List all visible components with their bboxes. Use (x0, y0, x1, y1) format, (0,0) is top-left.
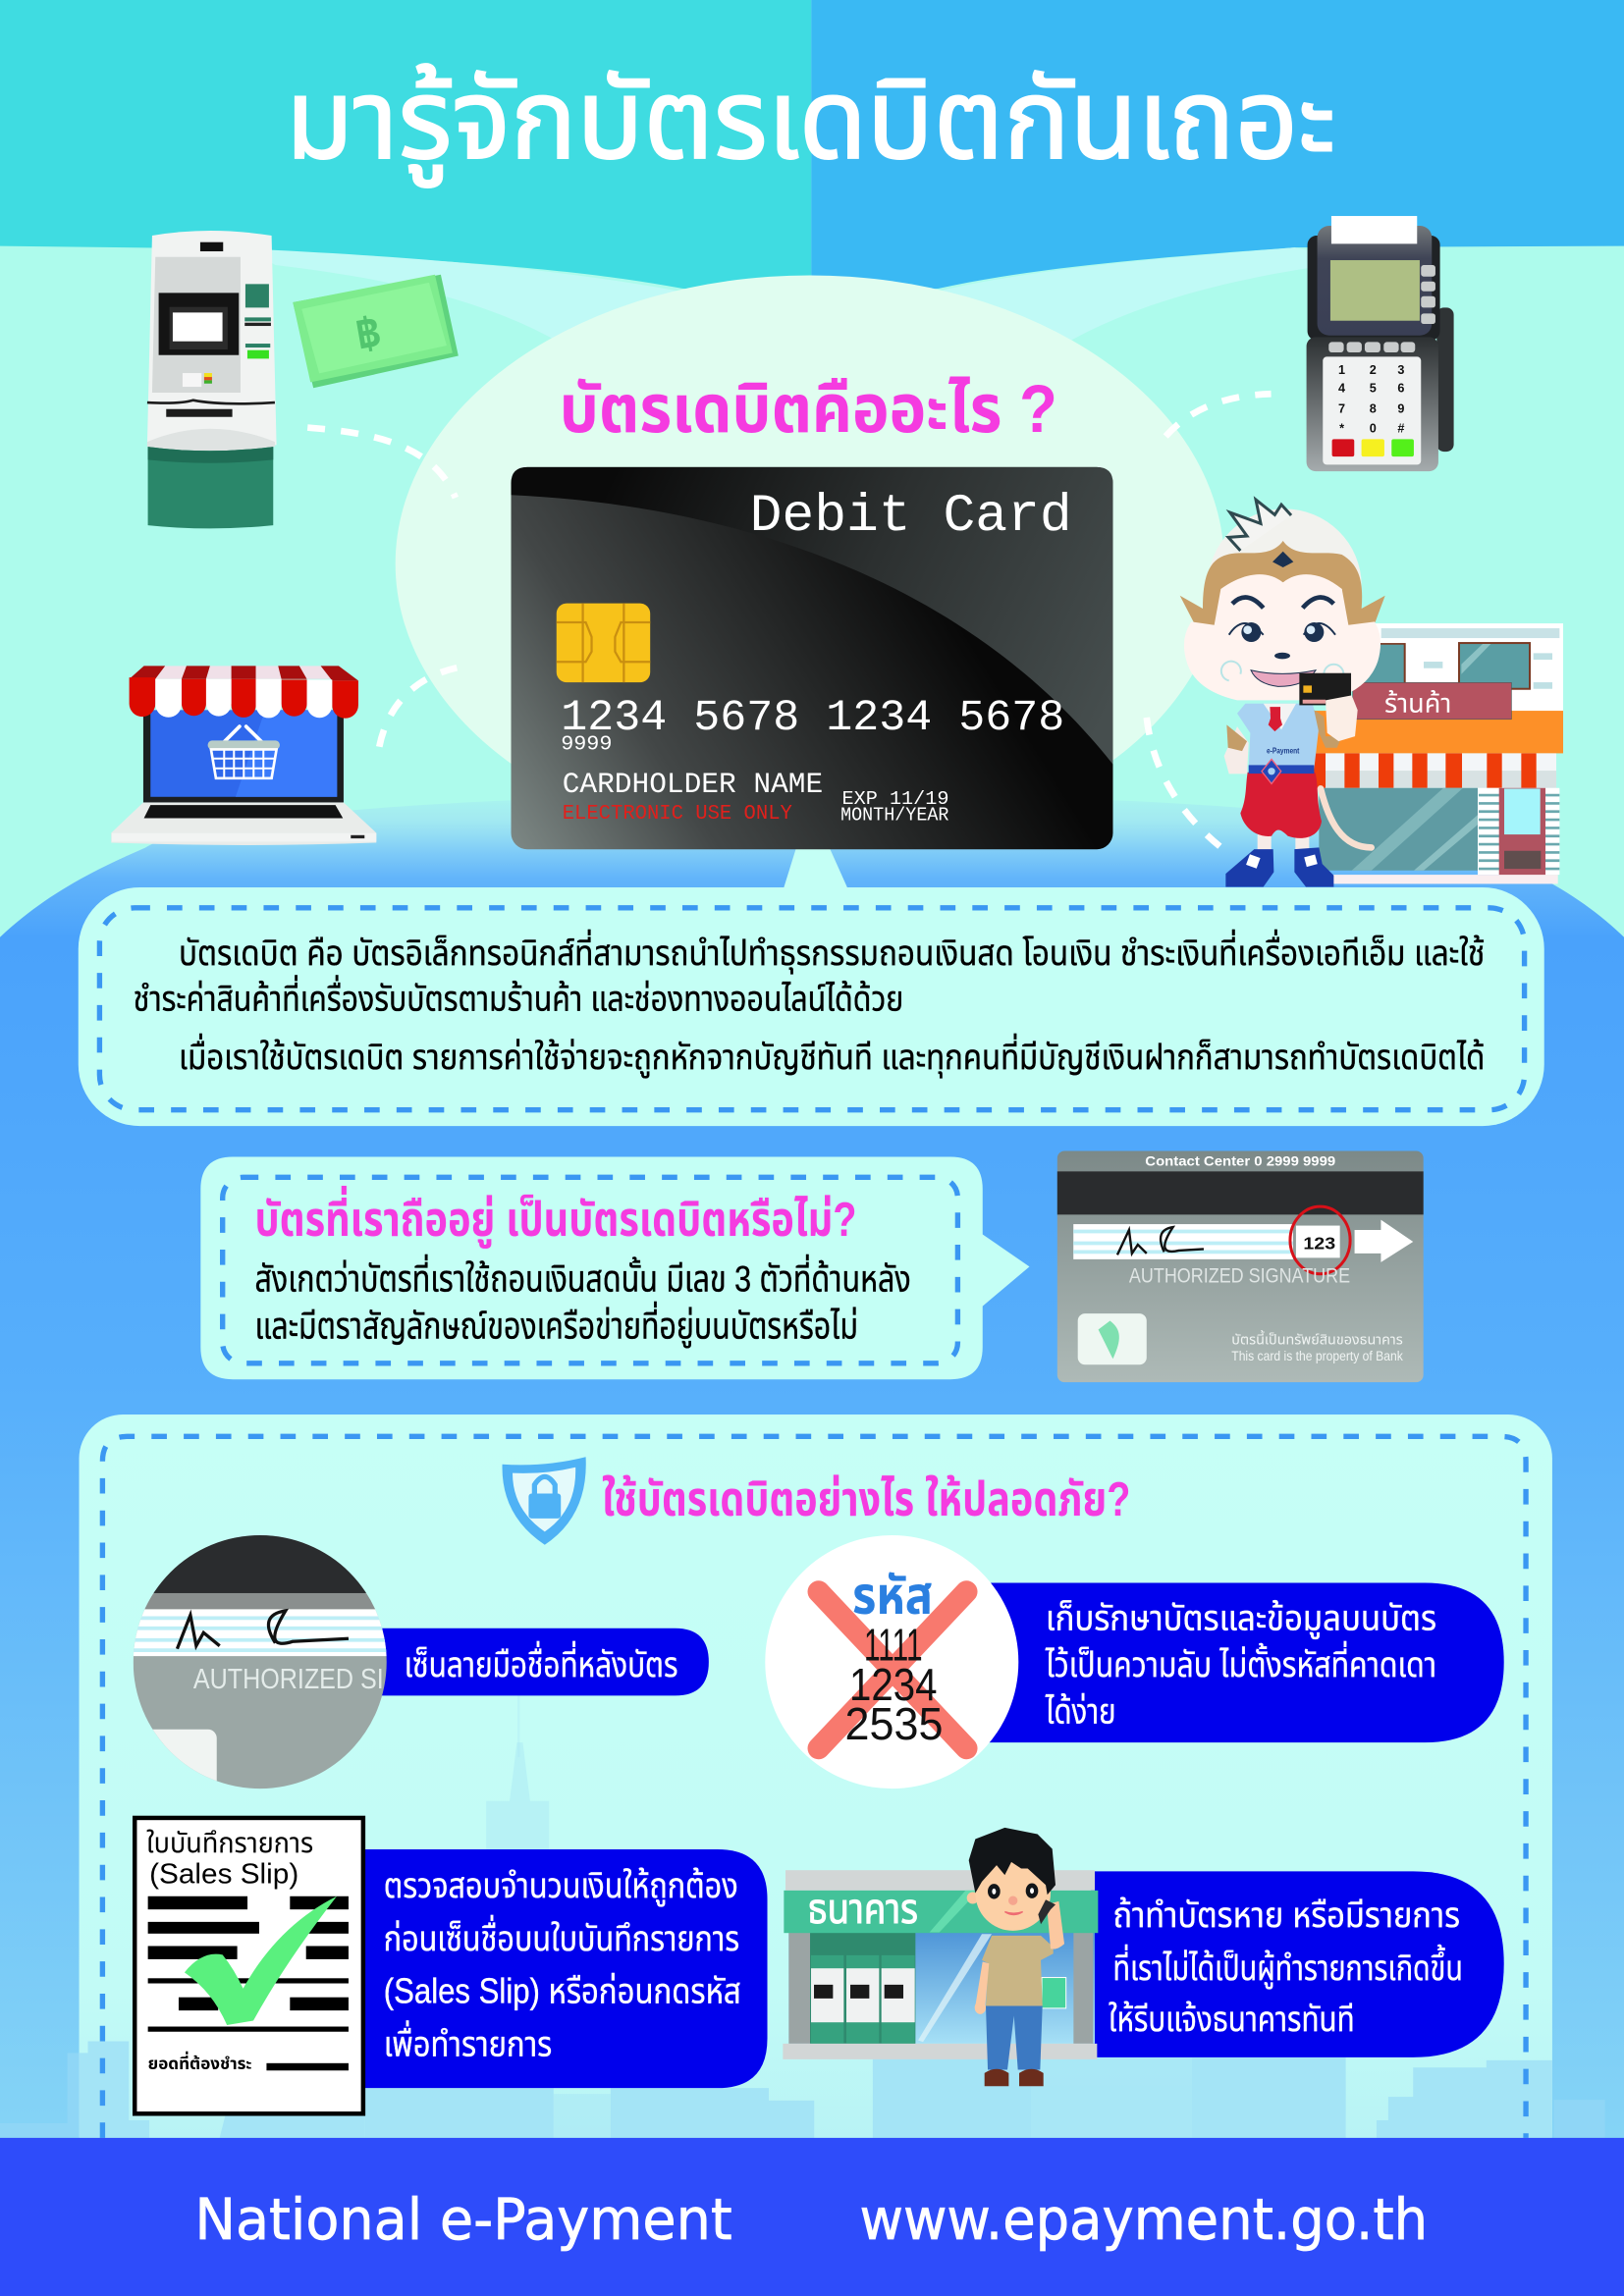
header band: blue right (811, 0, 1624, 300)
tip 3 pill (358, 1849, 768, 2088)
icon: POS terminal: 5 (1370, 381, 1377, 395)
tip 2 line 3: ได้ง่าย (1045, 1692, 1115, 1732)
currency sign: ฿ (352, 307, 386, 360)
safety heading: ใช้บัตรเดบิตอย่างไร ให้ปลอดภัย? (602, 1472, 1130, 1526)
bank sign (784, 1886, 1098, 1933)
bank sign: ธนาคาร (808, 1886, 918, 1932)
card label: Debit Card (750, 487, 1072, 547)
mouth (1251, 670, 1316, 686)
person (967, 1828, 1066, 2086)
back of head (1208, 508, 1362, 663)
mascot: monkey holding card (1180, 500, 1385, 886)
tip 4 pill (1091, 1871, 1504, 2057)
body line 2: และมีตราสัญลักษณ์ของเครือข่ายที่อยู่บนบัตรหรือไม่ (255, 1301, 858, 1348)
pale hill right (932, 247, 1362, 384)
icon: POS terminal: 1 (1338, 363, 1345, 377)
icon: POS terminal: * (1339, 422, 1344, 436)
sub heading: บัตรที่เราถืออยู่ เป็นบัตรเดบิตหรือไม่? (255, 1185, 856, 1249)
header band: teal left (0, 0, 811, 300)
cheek swirls (1221, 662, 1343, 680)
mascot: monkey holding card: e-Payment (1267, 745, 1299, 755)
arms (1224, 726, 1249, 774)
tip 2 line 1: เก็บรักษาบัตรและข้อมูลบนบัตร (1046, 1598, 1436, 1638)
icon: POS terminal: 9 (1397, 402, 1404, 416)
blue dome background (0, 794, 1624, 2296)
icon: POS terminal: 2 (1370, 363, 1377, 377)
icon: banknote (293, 275, 459, 388)
heading: what is a debit card: บัตรเดบิตคืออะไร ? (560, 371, 1057, 447)
tip 3 line 3: (Sales Slip) หรือก่อนกดรหัส (384, 1972, 741, 2011)
tip 2 circle (765, 1535, 1018, 1789)
authorized signature: AUTHORIZED SIGNATURE (1129, 1265, 1350, 1288)
icon: POS terminal: 6 (1397, 381, 1404, 395)
logo mark (1099, 1321, 1119, 1359)
bank logo (1078, 1313, 1147, 1364)
tail (1321, 788, 1372, 847)
footer text: National e-Payment: National e-Payment (194, 2186, 732, 2253)
bank building and person (783, 1828, 1098, 2086)
awning (130, 666, 358, 719)
forehead mark (1272, 552, 1293, 567)
vest (1237, 704, 1319, 769)
month year: MONTH/YEAR (840, 804, 949, 826)
panel: how to use safely (80, 1415, 1552, 2176)
example code 1: 1111 (864, 1620, 923, 1671)
dotted connector: laptop (379, 667, 457, 747)
icon: POS terminal: 8 (1370, 402, 1377, 416)
text line 2: ชำระค่าสินค้าที่เครื่องรับบัตรตามร้านค้า และช่องทางออนไลน์ได้ด้วย (134, 974, 903, 1018)
sales slip: ใบบันทึกรายการ (146, 1828, 313, 1859)
white arrow (1355, 1220, 1413, 1262)
tip 1 circle image (125, 1534, 388, 1795)
icon: POS terminal: # (1397, 422, 1404, 436)
central ellipse (396, 275, 1224, 852)
property text thai: บัตรนี้เป็นทรัพย์สินของธนาคาร (1231, 1329, 1403, 1348)
contact text: Contact Center 0 2999 9999 (1145, 1153, 1335, 1169)
icon: POS terminal (1307, 216, 1454, 471)
tip 4: report lost card (1091, 1871, 1504, 2057)
tip 4 line 3: ให้รีบแจ้งธนาคารทันที (1109, 2000, 1355, 2039)
sales slip: ยอดที่ต้องชำระ (148, 2052, 252, 2073)
example code 2: 1234 (849, 1659, 938, 1710)
tip 1 circle image: AUTHORIZED SI (193, 1664, 384, 1695)
skyline inside panel (80, 1655, 1568, 2138)
red circle (1290, 1206, 1350, 1274)
body line 1: สังเกตว่าบัตรที่เราใช้ถอนเงินสดนั้น มีเลข 3 ตัวที่ด้านหลัง (255, 1255, 911, 1300)
fur and ears (1180, 541, 1385, 643)
icon: ATM machine (147, 231, 277, 528)
face (1184, 574, 1380, 700)
eyes (1229, 622, 1335, 642)
signature strip: 123 (1303, 1233, 1335, 1253)
eyebrows (1232, 597, 1333, 608)
crown spikes (1228, 500, 1291, 551)
footer bar (0, 2138, 1624, 2296)
tip 3 line 2: ก่อนเซ็นชื่อบนใบบันทึกรายการ (384, 1914, 739, 1958)
hand (1326, 695, 1358, 741)
shop building (1313, 623, 1563, 883)
panel: definition text (79, 887, 1544, 1126)
tip 3 line 1: ตรวจสอบจำนวนเงินให้ถูกต้อง (384, 1866, 738, 1906)
title: มารู้จักบัตรเดบิตกันเถอะ (286, 58, 1335, 187)
icon: POS terminal: 3 (1397, 363, 1404, 377)
tip 2: keep secret (765, 1535, 1504, 1789)
basket (208, 726, 280, 778)
small card (1299, 673, 1351, 705)
icon: shield with lock (503, 1457, 586, 1545)
belt (1249, 759, 1314, 783)
dotted connector: mascot (1147, 718, 1219, 846)
footer text: website: www.epayment.go.th (859, 2186, 1428, 2253)
icon: POS terminal: 0 (1370, 422, 1377, 436)
tip 4 line 1: ถ้าทำบัตรหาย หรือมีรายการ (1112, 1896, 1460, 1935)
sales slip: (Sales Slip) (149, 1858, 298, 1890)
debit card front (512, 467, 1112, 849)
tip 1 text: เซ็นลายมือชื่อที่หลังบัตร (405, 1640, 678, 1684)
property text english: This card is the property of Bank (1231, 1349, 1403, 1363)
tip 2 line 2: ไว้เป็นความลับ ไม่ตั้งรหัสที่คาดเดา (1045, 1640, 1436, 1684)
chip (557, 604, 650, 682)
example code 3: 2535 (845, 1698, 943, 1749)
dashed frame of safety panel (102, 1436, 1526, 2138)
legs and shoes (1225, 834, 1333, 886)
panel tail from card (784, 846, 848, 888)
sales slip (135, 1818, 363, 2113)
card small number: 9999 (561, 734, 612, 757)
icon: POS terminal: 7 (1338, 402, 1345, 416)
shop sign: ร้านค้า (1384, 688, 1451, 718)
icon: POS terminal: 4 (1338, 381, 1345, 395)
word: code: รหัส (852, 1567, 933, 1626)
tip 2 pill (981, 1583, 1504, 1742)
dotted connector: ATM (307, 428, 456, 498)
tip 3 line 4: เพื่อทำรายการ (384, 2019, 552, 2063)
shop sign (1353, 682, 1511, 720)
icon: laptop shop (111, 666, 376, 845)
card number: 1234 5678 1234 5678 (561, 694, 1064, 743)
signature strip (1073, 1224, 1340, 1259)
dotted connector: POS (1165, 394, 1272, 437)
nose (1274, 653, 1290, 659)
check mark (185, 1896, 337, 2025)
trousers (1240, 773, 1322, 838)
skyline outside panel (0, 2053, 1605, 2138)
pale hill left (249, 249, 688, 381)
red cross (819, 1591, 966, 1748)
electronic use only: ELECTRONIC USE ONLY (563, 803, 792, 826)
tip 1: sign the card (125, 1534, 709, 1795)
text line 1: บัตรเดบิต คือ บัตรอิเล็กทรอนิกส์ที่สามารถนำไปทำธุรกรรมถอนเงินสด โอนเงิน ชำระเงินที่เครื่องเอทีเอ็ม และใช้ (179, 929, 1485, 974)
tip 3: check sales slip (135, 1818, 768, 2113)
tip 1 pill (373, 1629, 709, 1695)
panel: is it a debit card (200, 1156, 1029, 1379)
tip 4 line 2: ที่เราไม่ได้เป็นผู้ทำรายการเกิดขึ้น (1112, 1944, 1463, 1989)
cardholder name: CARDHOLDER NAME (563, 768, 823, 801)
card back illustration (1057, 1150, 1424, 1382)
expiry: EXP 11/19 (842, 788, 948, 810)
